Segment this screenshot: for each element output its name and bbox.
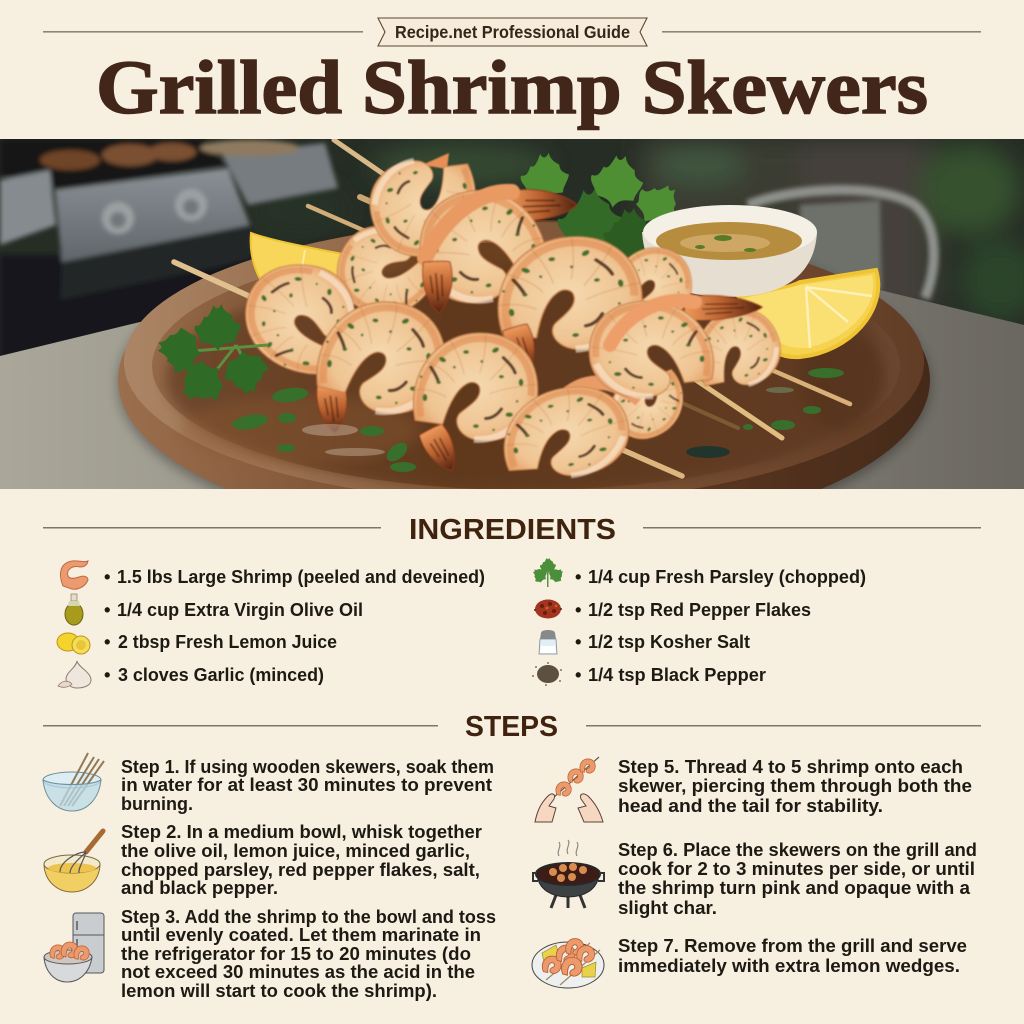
step 5 text: Step 5. Thread 4 to 5 shrimp onto each — [618, 756, 963, 777]
step 2 text: and black pepper. — [121, 877, 278, 898]
step 2 text: Step 2. In a medium bowl, whisk together — [121, 821, 482, 842]
icon: lemon — [57, 633, 90, 654]
steps section — [43, 711, 981, 1001]
ingredient list: left column: • — [104, 664, 110, 685]
header — [43, 18, 981, 130]
shrimp: top — [360, 146, 489, 267]
step 6 text — [618, 839, 977, 918]
ribbon badge: Recipe.net Professional Guide — [395, 22, 630, 42]
step 7 text — [618, 935, 967, 976]
icon: shrimp — [60, 561, 88, 589]
icon: bowl of water with skewers — [43, 753, 104, 811]
shrimp: back right — [613, 248, 692, 318]
chair — [748, 190, 934, 298]
hero photo: grilled shrimp skewers on a wooden plate — [0, 139, 1024, 489]
step 7 text: Step 7. Remove from the grill and serve — [618, 935, 967, 956]
ingredient list: right column: 1/2 tsp Kosher Salt — [588, 631, 750, 652]
steps rule right — [586, 725, 981, 726]
ingredients rule left — [43, 527, 381, 528]
shrimp: top behind — [322, 212, 447, 333]
ingredient list: right column: 1/4 tsp Black Pepper — [588, 664, 766, 685]
step 1 text: burning. — [121, 793, 193, 814]
step 3 text: until evenly coated. Let them marinate in — [121, 924, 481, 945]
shrimp: front right — [495, 378, 640, 487]
step 3 text: the refrigerator for 15 to 20 minutes (do — [121, 943, 471, 964]
icon: salt shaker — [539, 630, 557, 654]
icon: parsley — [529, 558, 567, 587]
ingredient list: left column: 1/4 cup Extra Virgin Olive Oil — [117, 599, 363, 620]
ingredient list: left column: 2 tbsp Fresh Lemon Juice — [118, 631, 337, 652]
shrimp: left front — [314, 296, 450, 435]
shrimp: far left — [241, 260, 357, 377]
shrimp: upper centre with tails — [411, 180, 577, 314]
ingredients section — [43, 514, 981, 688]
icon: garlic — [58, 661, 91, 688]
ingredient list: right column: • — [575, 664, 581, 685]
icon: kettle grill — [533, 840, 604, 908]
parsley flecks and oil — [231, 368, 844, 472]
ingredient list: right column: • — [575, 631, 581, 652]
step 3 text: lemon will start to cook the shrimp). — [121, 980, 437, 1001]
ingredient list: left column: • — [104, 631, 110, 652]
step 2 text: the olive oil, lemon juice, minced garlic, — [121, 840, 470, 861]
step 2 text — [121, 821, 482, 898]
step 3 text: Step 3. Add the shrimp to the bowl and toss — [121, 906, 496, 927]
ingredient list: right column: 1/2 tsp Red Pepper Flakes — [588, 599, 811, 620]
step 6 text: the shrimp turn pink and opaque with a — [618, 877, 971, 898]
icon: olive oil bottle — [65, 594, 83, 625]
wooden plate — [118, 220, 930, 546]
shrimp: right rear — [683, 298, 790, 400]
step 5 text — [618, 756, 972, 816]
table — [0, 290, 1024, 489]
steps rule left — [43, 725, 438, 726]
ingredient list: right column: 1/4 cup Fresh Parsley (chopped) — [588, 566, 866, 587]
lemon wedge left — [251, 233, 348, 291]
ingredient list: right column — [575, 566, 866, 685]
step 3 text: not exceed 30 minutes as the acid in the — [121, 961, 475, 982]
ingredients heading: INGREDIENTS — [409, 514, 616, 546]
ingredient list: right column: • — [575, 566, 581, 587]
step 5 text: head and the tail for stability. — [618, 795, 883, 816]
title: Grilled Shrimp Skewers — [96, 46, 928, 130]
ingredient list: left column — [104, 566, 485, 685]
icon: bowl with whisk — [44, 831, 103, 892]
step 6 text: cook for 2 to 3 minutes per side, or until — [618, 858, 975, 879]
step 2 text: chopped parsley, red pepper flakes, salt, — [121, 859, 480, 880]
shrimp: front middle — [413, 333, 538, 477]
ingredients rule right — [643, 527, 981, 528]
shrimp: centre right — [487, 229, 650, 376]
icon: plate of skewers with lemons — [532, 939, 604, 988]
shrimp pile — [241, 146, 790, 487]
steps heading: STEPS — [465, 711, 558, 743]
parsley sprig — [153, 304, 272, 414]
skewers — [174, 140, 850, 476]
icon: red pepper flakes — [534, 600, 562, 618]
step 5 text: skewer, piercing them through both the — [618, 775, 972, 796]
icon: threading shrimp on skewer with hands — [535, 757, 603, 822]
ribbon badge — [378, 18, 647, 46]
icon: black pepper — [532, 662, 562, 686]
ingredient list: left column: • — [104, 599, 110, 620]
ingredient list: left column: 3 cloves Garlic (minced) — [118, 664, 324, 685]
lemon wedge right — [738, 270, 878, 357]
blurred grill — [0, 139, 338, 365]
ingredient list: right column: • — [575, 599, 581, 620]
garden background — [0, 139, 1024, 489]
shrimp: right front with tail — [589, 293, 762, 397]
step 1 text — [121, 756, 494, 814]
dipping sauce bowl — [642, 205, 817, 297]
step 1 text: in water for at least 30 minutes to prevent — [121, 774, 492, 795]
step 6 text: slight char. — [618, 897, 717, 918]
ingredient list: left column: 1.5 lbs Large Shrimp (peeled and deveined) — [117, 566, 485, 587]
ingredient list: left column: • — [104, 566, 110, 587]
header rule right — [662, 31, 981, 33]
parsley behind shrimp — [521, 151, 690, 261]
step 3 text — [121, 906, 496, 1001]
step 7 text: immediately with extra lemon wedges. — [618, 955, 960, 976]
step 6 text: Step 6. Place the skewers on the grill and — [618, 839, 977, 860]
shrimp: front rear — [601, 359, 698, 451]
step 1 text: Step 1. If using wooden skewers, soak them — [121, 756, 494, 777]
header rule left — [43, 31, 363, 33]
icon: bowl of shrimp and refrigerator — [44, 913, 104, 982]
